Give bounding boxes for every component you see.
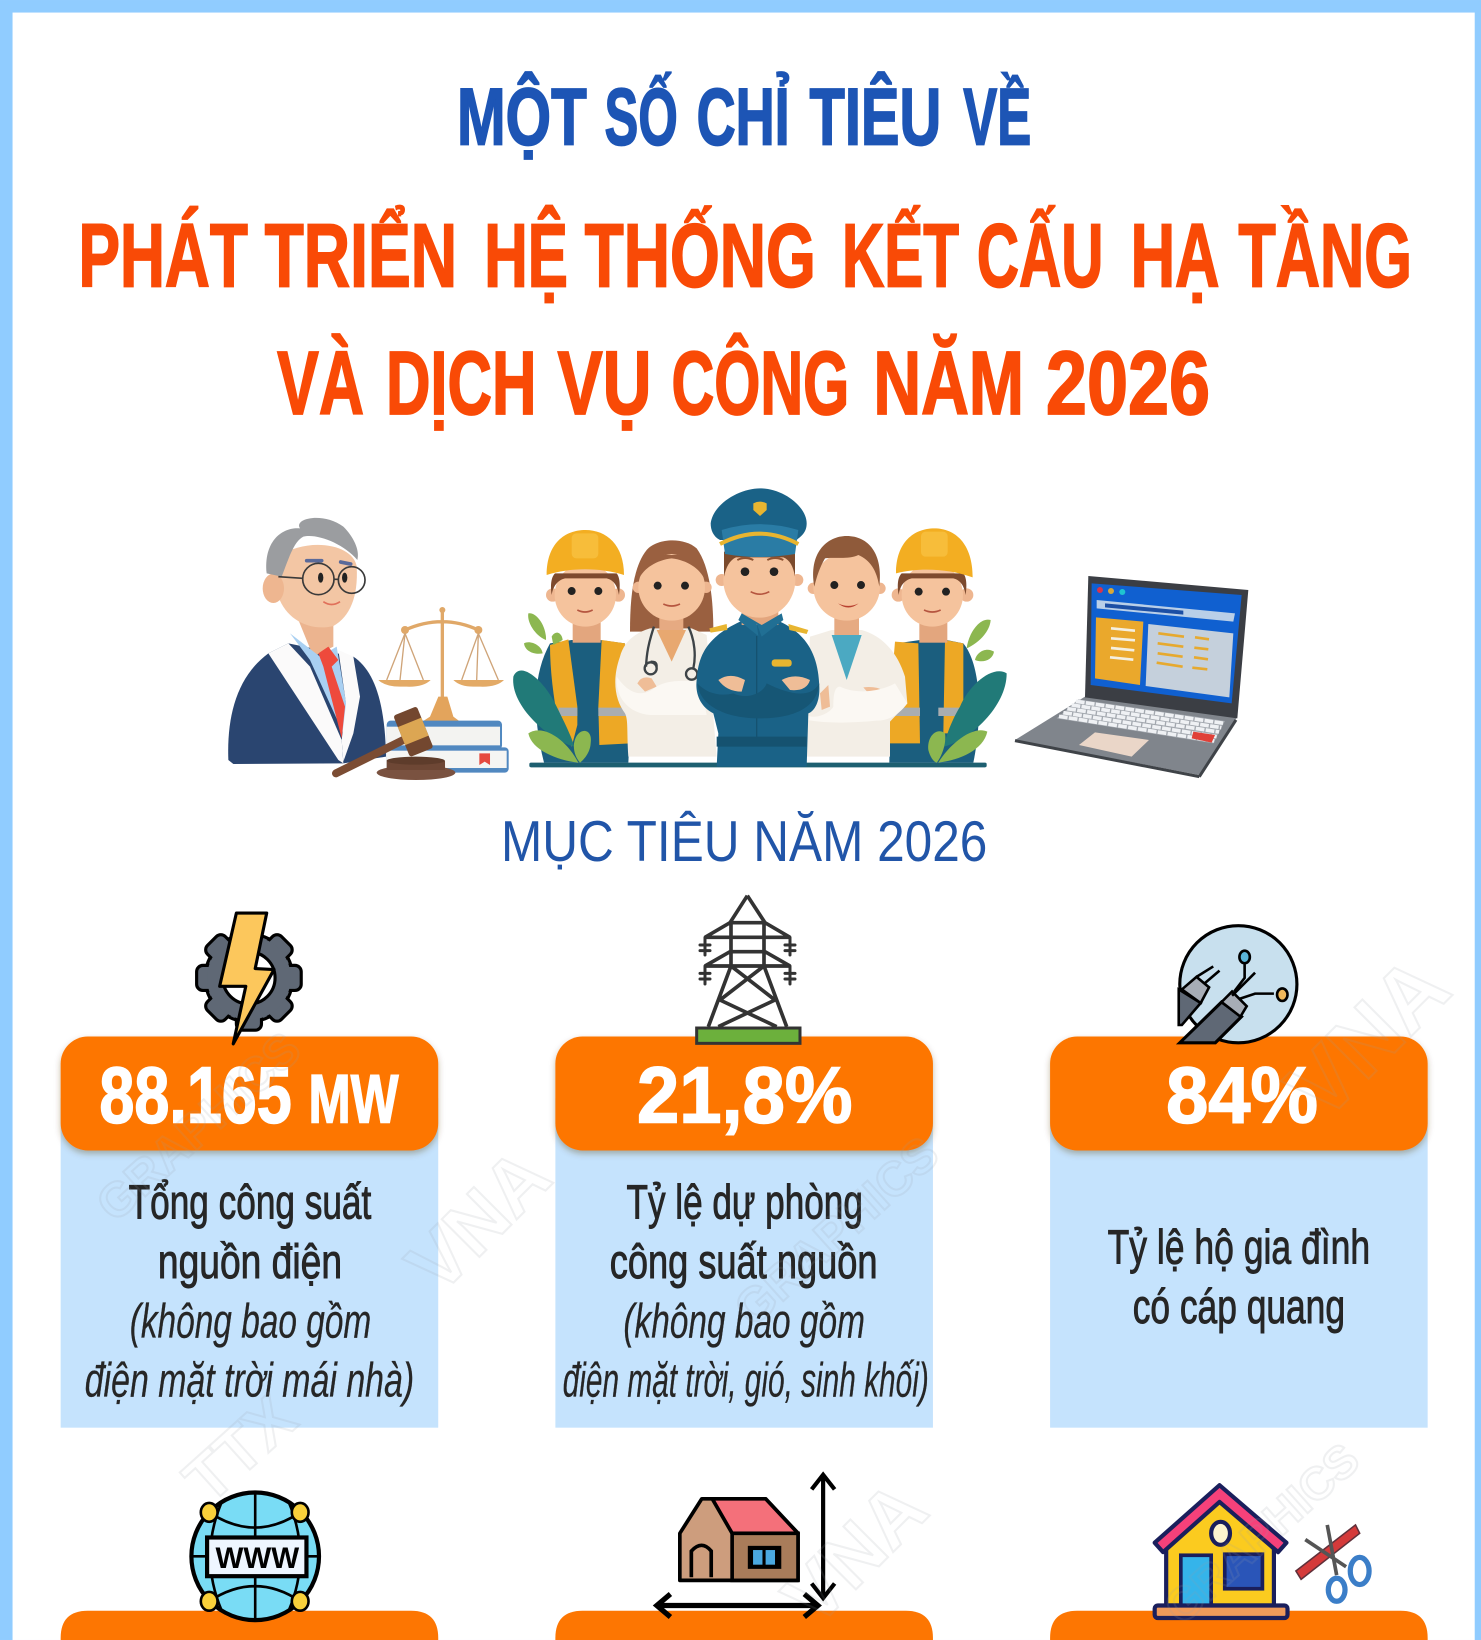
panel: house ribbon cutting (partly visible) bbox=[1050, 1485, 1428, 1640]
value badge bbox=[1050, 1611, 1428, 1640]
panel body bbox=[555, 1098, 933, 1428]
title line 1 bbox=[457, 72, 1031, 162]
description: (không bao gồm bbox=[623, 1295, 865, 1349]
description: nguồn điện bbox=[158, 1235, 342, 1289]
law books bbox=[387, 721, 509, 773]
watermarks bbox=[86, 937, 1468, 1640]
watermarks: GRAPHICS bbox=[86, 1022, 311, 1232]
icon: www globe bbox=[191, 1493, 319, 1620]
watermarks: TTX bbox=[170, 1380, 310, 1517]
illustration: judge and scales bbox=[228, 518, 509, 780]
title line 3: DỊCH bbox=[386, 334, 537, 434]
watermarks: VNA bbox=[1266, 937, 1468, 1138]
title line 2: KẾT bbox=[842, 205, 959, 307]
title line 2: HỆ bbox=[484, 205, 568, 307]
description bbox=[563, 1175, 929, 1407]
panel: housing area (partly visible) bbox=[555, 1475, 933, 1640]
panel: capacity reserve bbox=[555, 896, 933, 1428]
value badge bbox=[61, 1037, 438, 1151]
title line 3: CÔNG bbox=[671, 332, 849, 434]
title line 3: VỤ bbox=[557, 334, 652, 434]
ground bar bbox=[529, 763, 987, 767]
description: Tỷ lệ hộ gia đình bbox=[1108, 1220, 1370, 1274]
title line 3: 2026 bbox=[1046, 334, 1210, 434]
value badge bbox=[555, 1037, 933, 1151]
watermarks: VNA bbox=[767, 1465, 943, 1640]
description: điện mặt trời, gió, sinh khối) bbox=[563, 1353, 929, 1407]
right foliage bbox=[928, 620, 1007, 763]
value badge: 84% bbox=[1166, 1050, 1318, 1139]
icon: house with dimension arrows bbox=[657, 1475, 835, 1617]
police officer bbox=[696, 488, 819, 767]
panel body bbox=[1050, 1098, 1428, 1428]
title line 3 bbox=[277, 332, 1210, 434]
title line 1: CHỈ bbox=[697, 72, 790, 162]
illustration: group of workers bbox=[513, 488, 1007, 767]
title line 2: TRIỂN bbox=[265, 205, 457, 307]
title line 3: VÀ bbox=[277, 333, 364, 434]
description: có cáp quang bbox=[1133, 1280, 1345, 1334]
judge bbox=[228, 518, 386, 764]
title line 2: CẤU bbox=[977, 205, 1103, 307]
male doctor bbox=[803, 536, 907, 757]
panel body bbox=[61, 1098, 438, 1428]
title line 1: VỀ bbox=[963, 72, 1031, 162]
icon: transmission tower bbox=[697, 896, 800, 1043]
title line 1: TIÊU bbox=[810, 72, 941, 162]
scales bbox=[378, 607, 504, 722]
description: Tổng công suất bbox=[129, 1175, 372, 1229]
icon: new house and scissors bbox=[1155, 1485, 1369, 1618]
description bbox=[1108, 1220, 1370, 1334]
title line 2: PHÁT bbox=[78, 206, 248, 307]
title line 2 bbox=[78, 205, 1412, 307]
value badge: 21,8% bbox=[637, 1050, 852, 1139]
description: Tỷ lệ dự phòng bbox=[626, 1175, 863, 1229]
title line 2: HẠ bbox=[1131, 207, 1220, 307]
value badge: 88.165 bbox=[99, 1050, 292, 1139]
description: (không bao gồm bbox=[130, 1295, 371, 1349]
title line 2: THỐNG bbox=[585, 205, 816, 307]
value badge: MW bbox=[309, 1060, 399, 1137]
panel: websites (partly visible) bbox=[61, 1493, 438, 1640]
icon: gear and lightning bolt bbox=[197, 913, 301, 1044]
title line 3: NĂM bbox=[873, 333, 1024, 434]
illustration: public service people bbox=[228, 488, 1248, 780]
gavel bbox=[336, 706, 455, 780]
watermarks: GRAPHICS bbox=[1154, 1433, 1369, 1634]
value badge bbox=[61, 1611, 438, 1640]
watermarks: GRAPHICS bbox=[724, 1126, 949, 1336]
panel: households with fibre bbox=[1050, 926, 1428, 1428]
title bbox=[78, 72, 1412, 434]
female doctor bbox=[615, 540, 717, 757]
section heading: MỤC TIÊU NĂM 2026 bbox=[501, 810, 987, 874]
title line 1: MỘT bbox=[457, 72, 587, 162]
description bbox=[85, 1175, 414, 1407]
icon: fibre optic cable bbox=[1179, 926, 1297, 1043]
description: điện mặt trời mái nhà) bbox=[85, 1353, 414, 1407]
worker left bbox=[536, 530, 630, 763]
title line 1: SỐ bbox=[605, 72, 678, 162]
worker right bbox=[887, 528, 979, 763]
left foliage bbox=[513, 613, 591, 763]
panel: total power capacity bbox=[61, 913, 438, 1428]
icon: www globe: WWW bbox=[215, 1542, 300, 1575]
value badge bbox=[555, 1611, 933, 1640]
description: công suất nguồn bbox=[610, 1235, 878, 1289]
value badge bbox=[1050, 1037, 1428, 1151]
watermarks: VNA bbox=[390, 1133, 567, 1309]
illustration: laptop bbox=[1015, 576, 1248, 777]
